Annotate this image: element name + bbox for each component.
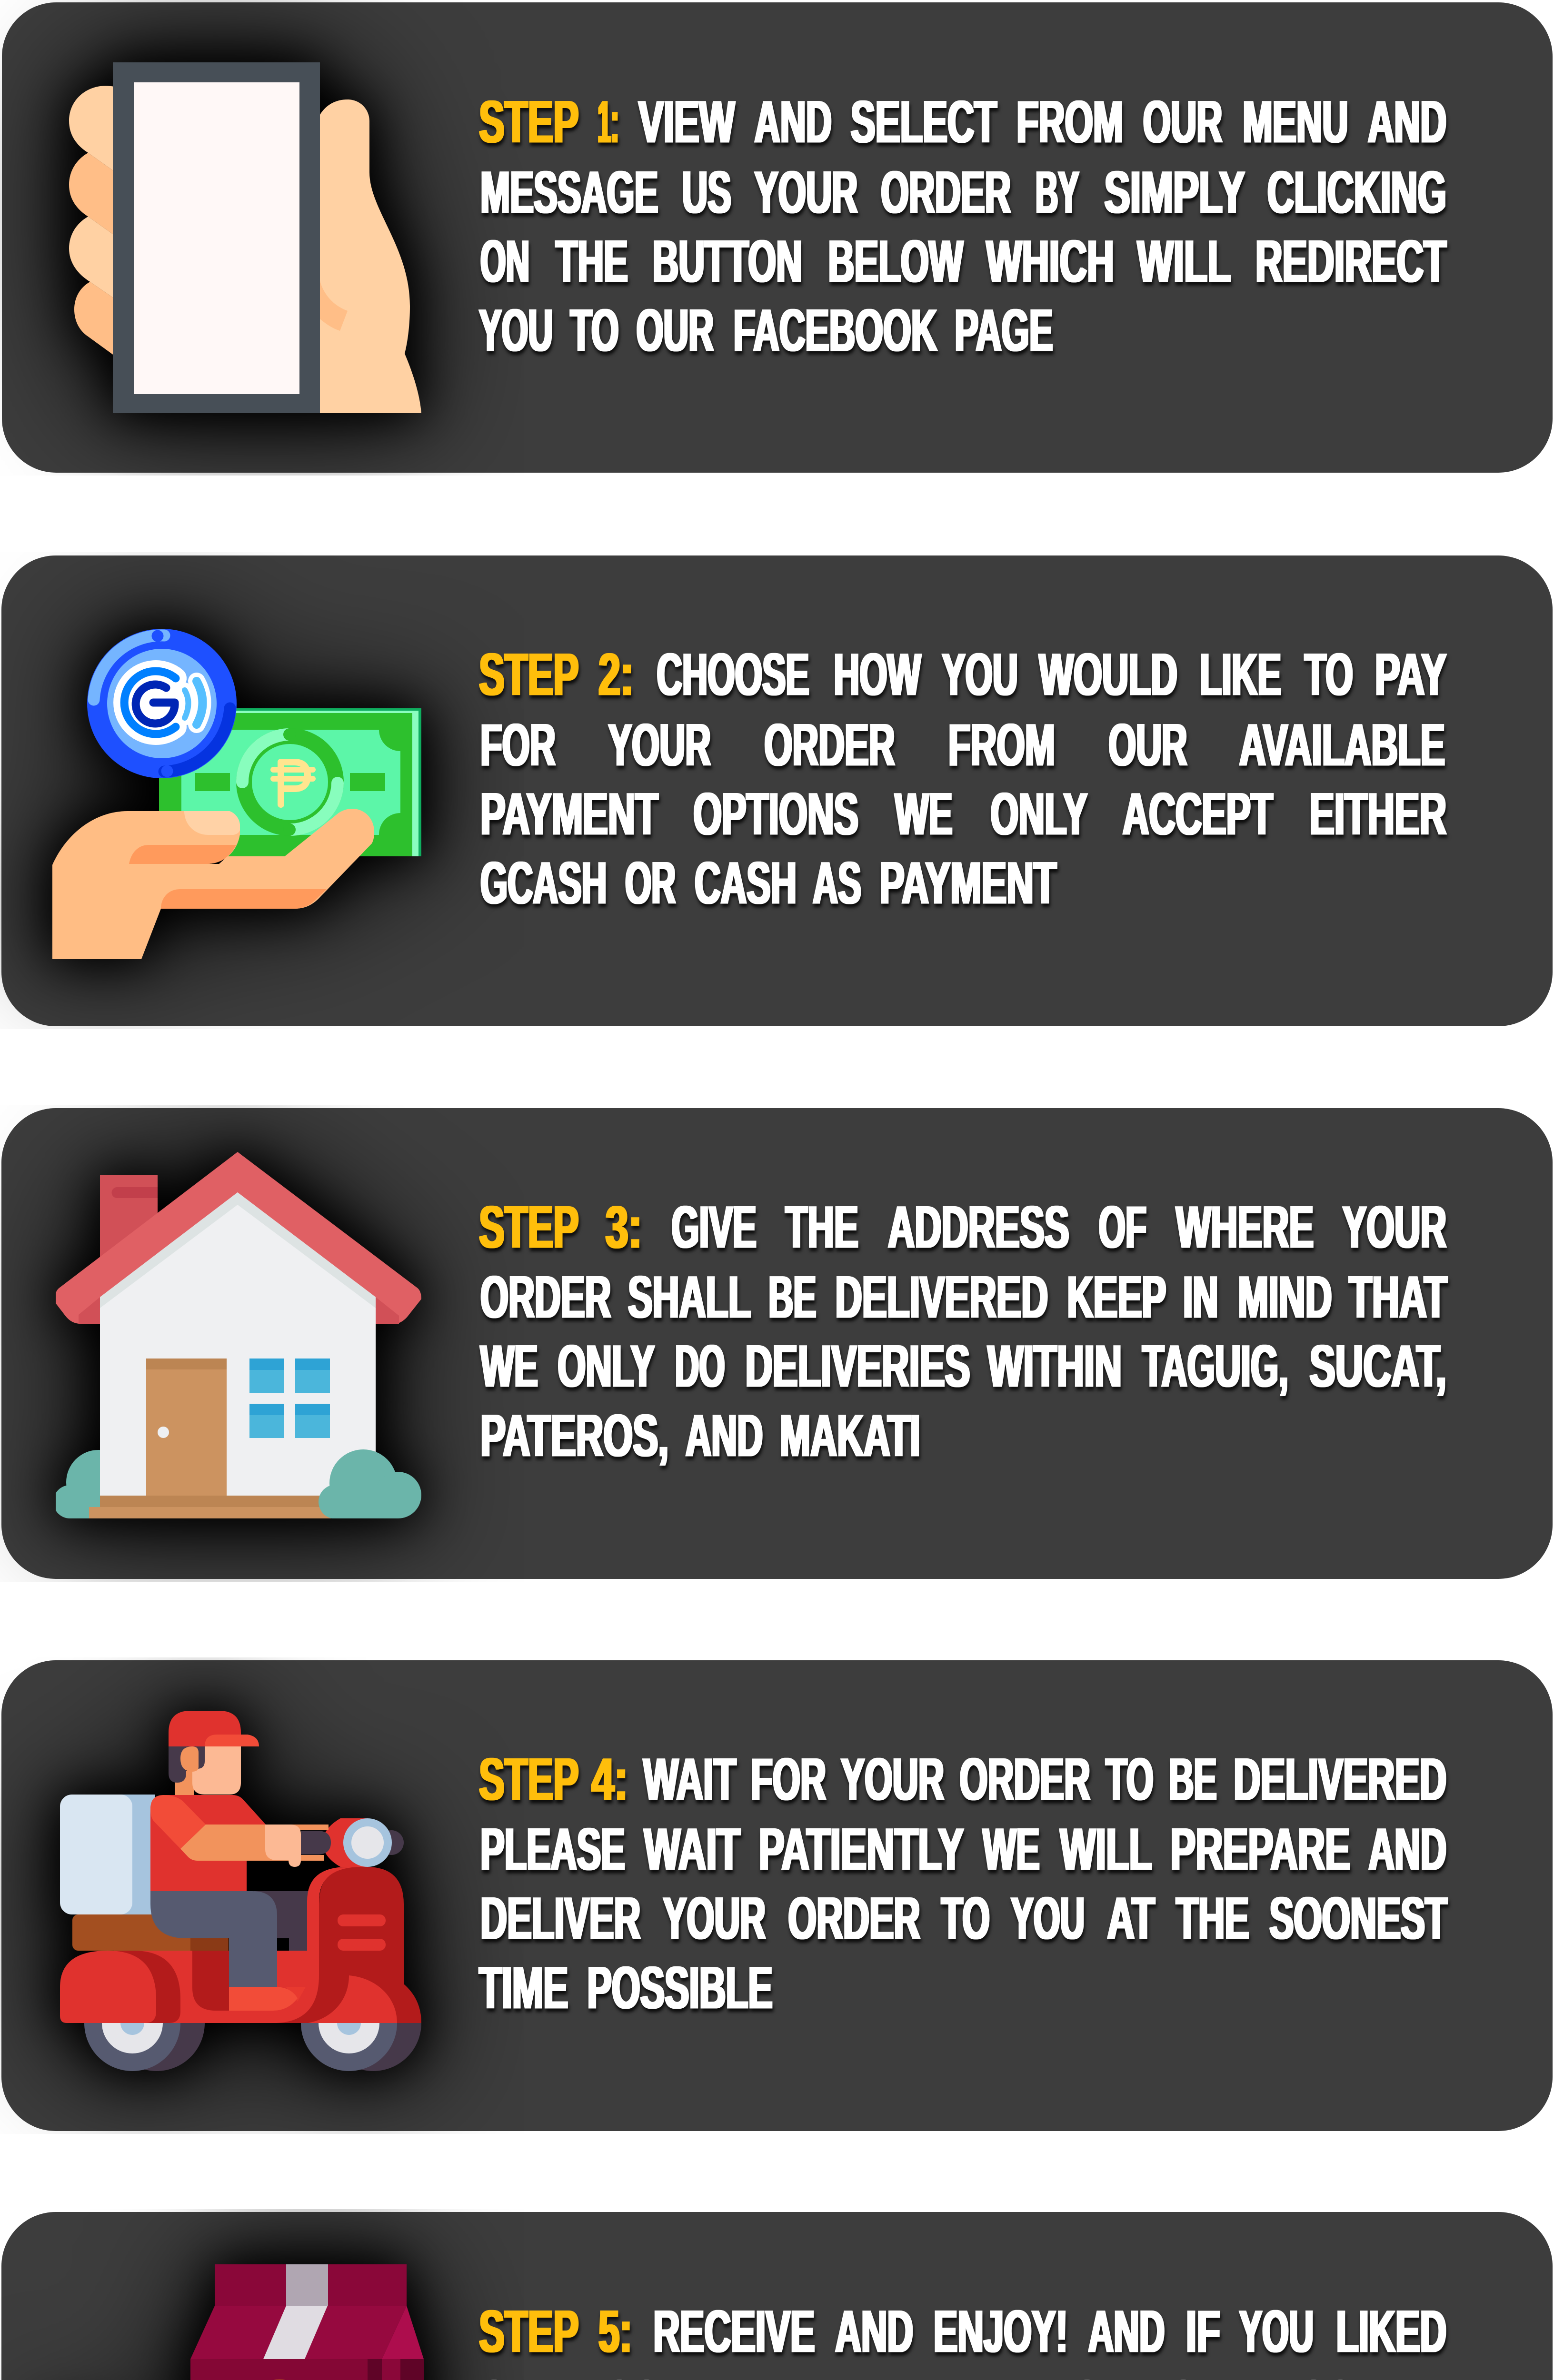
text: step 1 instructions: FACEBOOK bbox=[733, 297, 937, 364]
text: step 1 instructions: THE bbox=[556, 228, 628, 295]
text: step 2 instructions: YOU bbox=[942, 641, 1018, 708]
text: step 1 instructions: ORDER bbox=[881, 159, 1011, 226]
text: step 3 instructions: PATEROS, bbox=[480, 1402, 669, 1469]
text: step 4 instructions: POSSIBLE bbox=[587, 1954, 773, 2021]
text: step 1 instructions: MENU bbox=[1243, 89, 1348, 155]
text: step 3 instructions: DO bbox=[675, 1333, 725, 1399]
text: step 2 instructions: ACCEPT bbox=[1123, 781, 1273, 847]
step 3 label: STEP bbox=[479, 1194, 579, 1260]
text: step 5 instructions: AND bbox=[1088, 2298, 1165, 2365]
text: step 2 instructions: ONLY bbox=[990, 781, 1087, 847]
text: step 1 instructions: 1: bbox=[598, 89, 619, 155]
text: step 2 instructions: OPTIONS bbox=[693, 781, 858, 847]
icon: wheels bbox=[84, 1975, 421, 2071]
text: step 3 instructions: ORDER bbox=[480, 1264, 611, 1330]
step 2 label bbox=[479, 641, 634, 708]
icon: GCash coin bbox=[87, 629, 237, 778]
panel: step 2 bbox=[1, 555, 1553, 1026]
icon: GCash coin and peso bill on open hand bbox=[52, 629, 421, 959]
text: step 1 instructions bbox=[479, 89, 1446, 364]
text: step 5 instructions: ENJOY! bbox=[934, 2298, 1068, 2365]
text: step 1 instructions: BUTTON bbox=[653, 228, 802, 295]
text: step 4 instructions: TO bbox=[1106, 1746, 1154, 1813]
text: step 1 instructions: MESSAGE bbox=[480, 159, 658, 226]
panel: step 4: AND bbox=[1368, 1816, 1446, 1883]
text: step 5 instructions: 5: bbox=[598, 2298, 632, 2365]
text: step 4 instructions: WAIT bbox=[643, 1746, 736, 1813]
text: step 2 instructions: OUR bbox=[1108, 712, 1187, 778]
step 4 label bbox=[479, 1746, 628, 1813]
icon: open hand bbox=[52, 809, 374, 959]
text: step 3 instructions: WE bbox=[480, 1333, 538, 1399]
text: step 3 instructions: WHERE bbox=[1176, 1194, 1314, 1260]
icon: delivery box bbox=[60, 1795, 155, 1914]
text: step 3 instructions: DELIVERED bbox=[835, 1264, 1048, 1330]
text: step 1 instructions: FROM bbox=[1016, 89, 1123, 155]
text: step 5 instructions: IF bbox=[1186, 2298, 1220, 2365]
text: step 4 instructions: WILL bbox=[1060, 1816, 1152, 1883]
text: step 4 instructions: TIME bbox=[479, 1954, 568, 2021]
text: step 3 instructions: 3: bbox=[606, 1194, 642, 1260]
text: step 5 instructions: AND bbox=[835, 2298, 913, 2365]
text: step 5 instructions bbox=[479, 2298, 1446, 2380]
text: step 3 instructions: SHALL bbox=[628, 1264, 751, 1330]
text: step 4 instructions: YOU bbox=[1011, 1885, 1085, 1952]
icon: hand holding food bag bbox=[53, 2264, 424, 2380]
text: step 1 instructions: BY bbox=[1036, 159, 1079, 226]
text: step 4 instructions: WE bbox=[983, 1816, 1040, 1883]
step 4 label: STEP bbox=[479, 1746, 579, 1813]
text: step 2 instructions: AS bbox=[813, 850, 861, 916]
text: step 3 instructions: IN bbox=[1183, 1264, 1218, 1330]
text: step 2 instructions: ORDER bbox=[764, 712, 895, 778]
text: step 1 instructions: WILL bbox=[1137, 228, 1231, 295]
text: step 4 instructions: ORDER bbox=[788, 1885, 920, 1952]
step 5 label: STEP bbox=[479, 2298, 579, 2365]
text: step 3 instructions: DELIVERIES bbox=[745, 1333, 970, 1399]
panel: step 5 bbox=[1, 2212, 1553, 2380]
text: step 3 instructions: OF bbox=[1099, 1194, 1146, 1260]
text: step 2 instructions: LIKE bbox=[1200, 641, 1281, 708]
text: step 5 instructions: YOU bbox=[1239, 2298, 1314, 2365]
text: step 4 instructions: THE bbox=[1176, 1885, 1249, 1952]
icon: house bbox=[53, 1152, 421, 1519]
text: step 1 instructions: BELOW bbox=[828, 228, 963, 295]
text: step 3 instructions: KEEP bbox=[1067, 1264, 1166, 1330]
text: step 4 instructions: DELIVER bbox=[480, 1885, 641, 1952]
text: step 1 instructions: OUR bbox=[1143, 89, 1222, 155]
text: step 3 instructions: MIND bbox=[1238, 1264, 1332, 1330]
text: step 4 instructions: AT bbox=[1107, 1885, 1155, 1952]
text: step 2 instructions: GCASH bbox=[480, 850, 607, 916]
icon: hand holding phone bbox=[69, 62, 421, 413]
text: step 2 instructions: HOW bbox=[834, 641, 921, 708]
text: step 2 instructions bbox=[479, 641, 1446, 916]
panel: step 3 bbox=[1, 1108, 1553, 1579]
text: step 2 instructions: PAYMENT bbox=[480, 781, 658, 847]
text: step 2 instructions: PAYMENT bbox=[879, 850, 1056, 916]
text: step 2 instructions: YOUR bbox=[608, 712, 711, 778]
text: step 3 instructions: GIVE bbox=[671, 1194, 757, 1260]
panel: step 1 bbox=[2, 2, 1553, 473]
step 2 label: STEP bbox=[479, 641, 579, 708]
text: step 3 instructions: THE bbox=[786, 1194, 858, 1260]
panel: step 2: PAY bbox=[1375, 641, 1446, 708]
text: step 1 instructions: SIMPLY bbox=[1105, 159, 1245, 226]
step 1 label: STEP bbox=[479, 89, 579, 155]
text: step 4 instructions: YOUR bbox=[841, 1746, 944, 1813]
text: step 3 instructions: ADDRESS bbox=[888, 1194, 1069, 1260]
text: step 2 instructions: CHOOSE bbox=[657, 641, 809, 708]
text: step 1 instructions: WHICH bbox=[986, 228, 1114, 295]
text: step 1 instructions: YOUR bbox=[755, 159, 858, 226]
text: step 3 instructions: AND bbox=[686, 1402, 763, 1469]
icon: delivery rider on scooter bbox=[60, 1711, 421, 2071]
step 1 label bbox=[479, 89, 619, 155]
text: step 4 instructions: BE bbox=[1169, 1746, 1217, 1813]
text: step 3 instructions: MAKATI bbox=[780, 1402, 920, 1469]
text: step 2 instructions: 2: bbox=[598, 641, 634, 708]
text: step 1 instructions: VIEW bbox=[638, 89, 735, 155]
text: step 2 instructions: WOULD bbox=[1039, 641, 1177, 708]
text: step 1 instructions: SELECT bbox=[851, 89, 997, 155]
text: step 1 instructions: OUR bbox=[637, 297, 714, 364]
panel: step 4 bbox=[1, 1660, 1553, 2131]
text: step 3 instructions bbox=[479, 1194, 1447, 1469]
text: step 3 instructions: WITHIN bbox=[988, 1333, 1122, 1399]
text: step 4 instructions: PLEASE bbox=[480, 1816, 625, 1883]
text: step 4 instructions: TO bbox=[941, 1885, 990, 1952]
icon: food bag bbox=[190, 2264, 424, 2380]
text: step 4 instructions: FOR bbox=[751, 1746, 826, 1813]
text: step 4 instructions: 4: bbox=[591, 1746, 628, 1813]
text: step 2 instructions: OR bbox=[625, 850, 676, 916]
text: step 2 instructions: WE bbox=[895, 781, 953, 847]
text: step 2 instructions: TO bbox=[1305, 641, 1353, 708]
text: step 3 instructions: BE bbox=[768, 1264, 816, 1330]
text: step 3 instructions: TAGUIG, bbox=[1142, 1333, 1288, 1399]
text: step 2 instructions: FOR bbox=[480, 712, 556, 778]
icon: rider bbox=[150, 1711, 331, 1987]
text: step 4 instructions bbox=[479, 1746, 1447, 2021]
text: step 1 instructions: US bbox=[682, 159, 731, 226]
text: step 1 instructions: TO bbox=[570, 297, 619, 364]
text: step 3 instructions: ONLY bbox=[558, 1333, 655, 1399]
text: step 2 instructions: CASH bbox=[695, 850, 797, 916]
step 5 label bbox=[479, 2298, 632, 2365]
icon: scooter body bbox=[60, 1818, 421, 2023]
text: step 4 instructions: YOUR bbox=[663, 1885, 766, 1952]
text: step 5 instructions: RECEIVE bbox=[653, 2298, 815, 2365]
text: step 4 instructions: ORDER bbox=[960, 1746, 1090, 1813]
icon: peso bill bbox=[159, 708, 421, 856]
text: step 2 instructions: FROM bbox=[948, 712, 1055, 778]
text: step 1 instructions: ON bbox=[480, 228, 529, 295]
text: step 1 instructions: AND bbox=[755, 89, 832, 155]
text: step 1 instructions: PAGE bbox=[955, 297, 1053, 364]
text: step 1 instructions: YOU bbox=[479, 297, 553, 364]
panel: step 1: AND bbox=[1368, 89, 1446, 155]
text: step 4 instructions: PATIENTLY bbox=[758, 1816, 964, 1883]
text: step 4 instructions: WAIT bbox=[644, 1816, 740, 1883]
